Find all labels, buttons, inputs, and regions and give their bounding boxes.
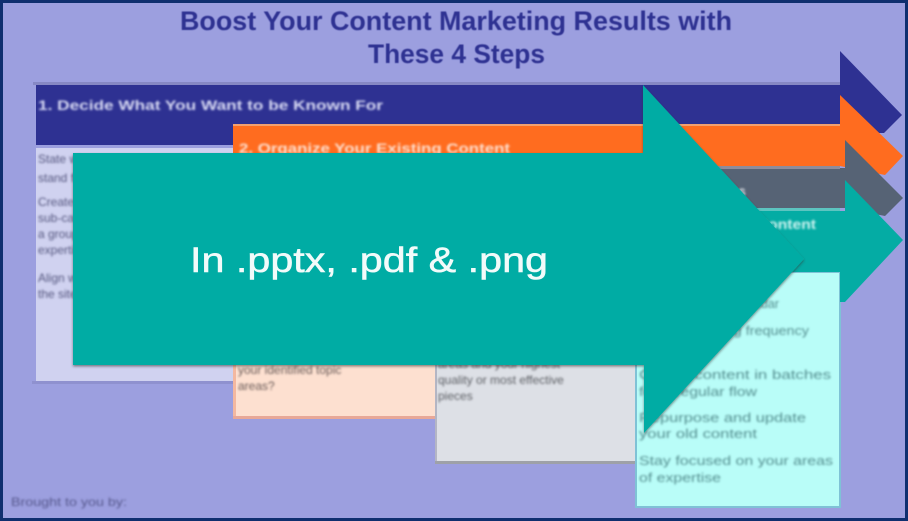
panel: step 4 details: Use an editorial calendar <box>639 296 780 311</box>
step 1 label: 1. Decide What You Want to be Known For <box>38 98 384 113</box>
panel: step 4 details: Repurpose and update <box>639 410 806 425</box>
panel: step 4 details: and plan <box>639 341 689 356</box>
arrow: step 3 header <box>435 140 903 216</box>
panel: step 1 details: sub-categories <box>38 211 117 225</box>
title: These 4 Steps <box>368 39 545 69</box>
panel: step 1 details: stand for <box>38 171 85 185</box>
arrow: step 1 header <box>33 51 902 145</box>
panel: step 1 details: a group of <box>38 227 93 241</box>
panel: step 4 details: your old content <box>639 426 757 441</box>
panel: step 4 details: Set a publishing frequency <box>639 323 810 338</box>
panel: step 1 details <box>32 148 233 384</box>
footer credit: Brought to you by: <box>11 495 127 509</box>
panel: step 4 details <box>635 270 841 508</box>
panel: step 3 details: quality or most effective <box>438 373 564 387</box>
title: Boost Your Content Marketing Results with <box>180 6 732 36</box>
panel: step 1 details: expertise <box>38 243 87 257</box>
panel: step 1 details: State what you <box>38 152 117 166</box>
panel: step 4 details: Stay focused on your areas <box>639 453 834 468</box>
panel: step 1 details: Align with <box>38 271 89 285</box>
step 4 label: 4. Publish Your Content <box>640 217 817 232</box>
step 2 label: 2. Organize Your Existing Content <box>239 141 511 156</box>
step 3 label: Gaps <box>712 184 746 199</box>
panel: step 2 details: areas? <box>238 379 275 393</box>
panel: step 3 details: pieces <box>438 389 473 403</box>
title <box>180 6 732 69</box>
panel: step 4 details: of expertise <box>639 470 721 485</box>
panel: step 2 details: your identified topic <box>238 363 341 377</box>
panel: step 3 details <box>435 200 636 464</box>
arrow: step 2 header <box>233 95 903 175</box>
panel: step 4 details: Create content in batches <box>639 367 832 382</box>
panel: step 1 details: Create topics <box>38 195 109 209</box>
overlay caption: In .pptx, .pdf & .png <box>190 241 548 280</box>
arrow: step 4 header <box>636 180 903 302</box>
panel: step 1 details: the site <box>38 287 77 301</box>
panel: step 2 details <box>233 160 435 419</box>
panel: step 3 details: areas and your highest <box>438 357 561 371</box>
panel: step 4 details: for a regular flow <box>639 384 758 399</box>
